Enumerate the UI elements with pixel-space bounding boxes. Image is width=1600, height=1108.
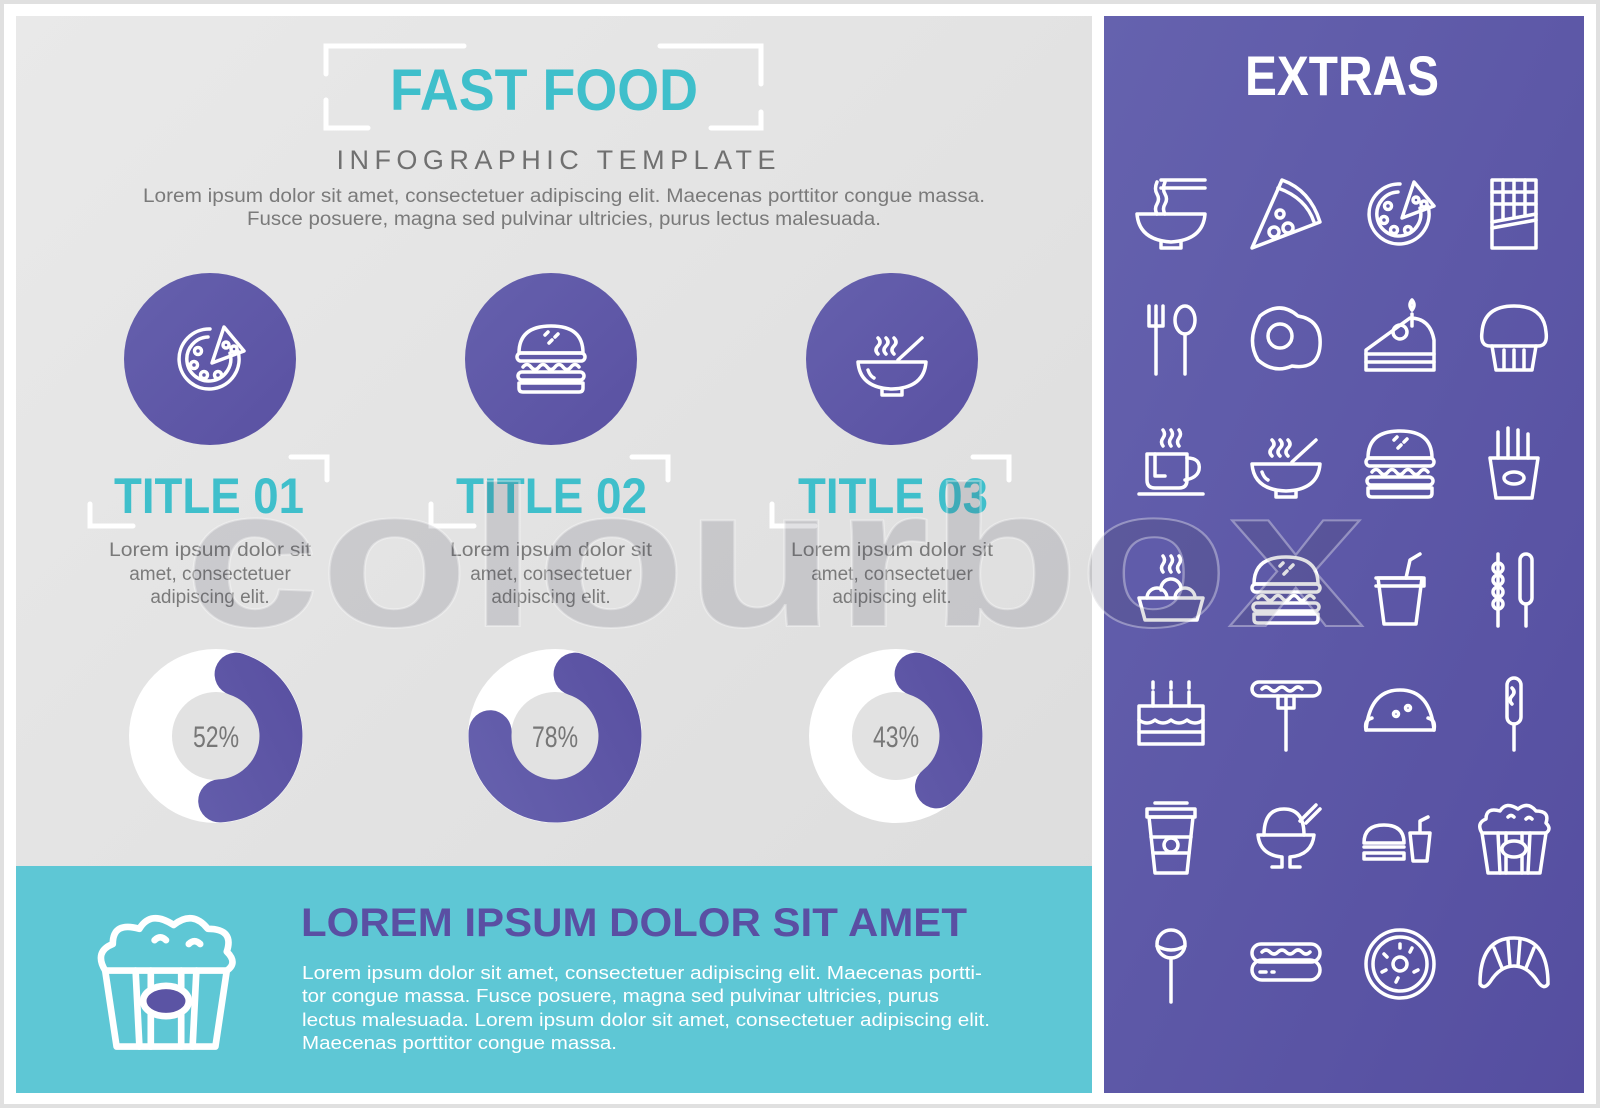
icon: lollipop bbox=[1157, 930, 1185, 1002]
donut chart 78%: 78% bbox=[532, 721, 578, 754]
icon grid bbox=[1137, 180, 1549, 1002]
panel: teal footer bbox=[16, 866, 1092, 1093]
footer text: Maecenas porttitor congue massa. bbox=[302, 1032, 617, 1053]
item 3: title and text: Lorem ipsum dolor sit bbox=[791, 540, 994, 561]
item 2: title and text: TITLE 02 bbox=[456, 468, 647, 524]
panel: main left bbox=[16, 16, 1092, 1093]
donut chart 52%: 52% bbox=[193, 721, 239, 754]
panel: extras bbox=[1104, 16, 1584, 1093]
icon: popcorn bbox=[101, 918, 233, 1047]
icon: hot dog bbox=[1252, 944, 1320, 980]
item 1: title and text: Lorem ipsum dolor sit bbox=[109, 540, 312, 561]
item 1: title and text: amet, consectetuer bbox=[129, 564, 291, 585]
icon circle: soup bowl bbox=[806, 273, 978, 445]
intro text bbox=[143, 186, 985, 230]
item 3: title and text: amet, consectetuer bbox=[811, 564, 973, 585]
icon: burger bbox=[1252, 557, 1320, 623]
icon: fries bbox=[1490, 428, 1538, 498]
item 3: title and text bbox=[772, 457, 1009, 608]
icon: birthday cake bbox=[1139, 682, 1203, 744]
item 1: title and text: adipiscing elit. bbox=[150, 587, 270, 608]
icon: big burger bbox=[1366, 431, 1434, 497]
icon circle: burger bbox=[465, 273, 637, 445]
item 2: title and text: Lorem ipsum dolor sit bbox=[450, 540, 653, 561]
donut chart 52% bbox=[129, 649, 303, 823]
title bracket frame bbox=[326, 46, 761, 128]
item 2: title and text bbox=[431, 457, 668, 608]
icon: cake slice bbox=[1366, 300, 1434, 370]
icon: pizza slice bbox=[1252, 180, 1320, 248]
icon: chocolate bbox=[1492, 180, 1536, 248]
icon: popcorn bbox=[1480, 805, 1549, 873]
footer text: Lorem ipsum dolor sit amet, consectetuer adipiscing elit. Maecenas porttі- bbox=[302, 962, 982, 983]
icon: burger and drink bbox=[1364, 817, 1430, 861]
icon: taco bbox=[1366, 690, 1434, 730]
icon: spaghetti bbox=[1139, 556, 1203, 620]
footer heading: LOREM IPSUM DOLOR SIT AMET bbox=[301, 901, 967, 945]
item 3: title and text: TITLE 03 bbox=[798, 468, 988, 524]
icon: skewer and corn dog bbox=[1493, 554, 1532, 626]
subtitle: INFOGRAPHIC TEMPLATE bbox=[336, 145, 776, 175]
icon circle: pizza bbox=[124, 273, 296, 445]
intro text: Lorem ipsum dolor sit amet, consectetuer adipiscing elit. Maecenas porttitor congue massa. bbox=[143, 186, 985, 207]
donut chart 43%: 43% bbox=[873, 721, 919, 754]
footer text bbox=[302, 962, 990, 1053]
extras heading: EXTRAS bbox=[1245, 44, 1439, 107]
title: FAST FOOD: FAST FOOD bbox=[390, 58, 698, 123]
icon: cup with straw bbox=[1376, 554, 1424, 624]
icon: noodles bbox=[1137, 180, 1205, 248]
icon: fork spoon bbox=[1149, 306, 1195, 374]
icon: sausage fork bbox=[1252, 682, 1320, 750]
item 1: title and text: TITLE 01 bbox=[114, 468, 304, 524]
icon: croissant bbox=[1480, 938, 1548, 987]
item 3: title and text: adipiscing elit. bbox=[832, 587, 952, 608]
footer text: tor congue massa. Fusce posuere, magna sed pulvinar ultricies, purus bbox=[302, 985, 939, 1006]
icon: ice cream bbox=[1258, 805, 1320, 867]
donut chart 43% bbox=[809, 649, 983, 823]
item 2: title and text: amet, consectetuer bbox=[470, 564, 632, 585]
item 2: title and text: adipiscing elit. bbox=[491, 587, 611, 608]
donut chart 78% bbox=[468, 649, 642, 823]
watermark: colourbox bbox=[184, 446, 1364, 669]
icon: coffee cup bbox=[1139, 430, 1203, 494]
icon: pizza bbox=[1369, 182, 1434, 244]
icon: corn dog bbox=[1507, 678, 1521, 750]
intro text: Fusce posuere, magna sed pulvinar ultricies, purus lectus malesuada. bbox=[247, 209, 881, 230]
icon: donut bbox=[1366, 930, 1434, 998]
icon: egg bbox=[1252, 308, 1320, 369]
icon: muffin bbox=[1482, 306, 1546, 370]
item 1: title and text bbox=[90, 457, 327, 608]
footer text: lectus malesuada. Lorem ipsum dolor sit amet, consectetuer adipiscing elit. bbox=[302, 1009, 990, 1030]
icon: coffee to go bbox=[1147, 803, 1195, 873]
icon: soup bbox=[1252, 440, 1320, 497]
